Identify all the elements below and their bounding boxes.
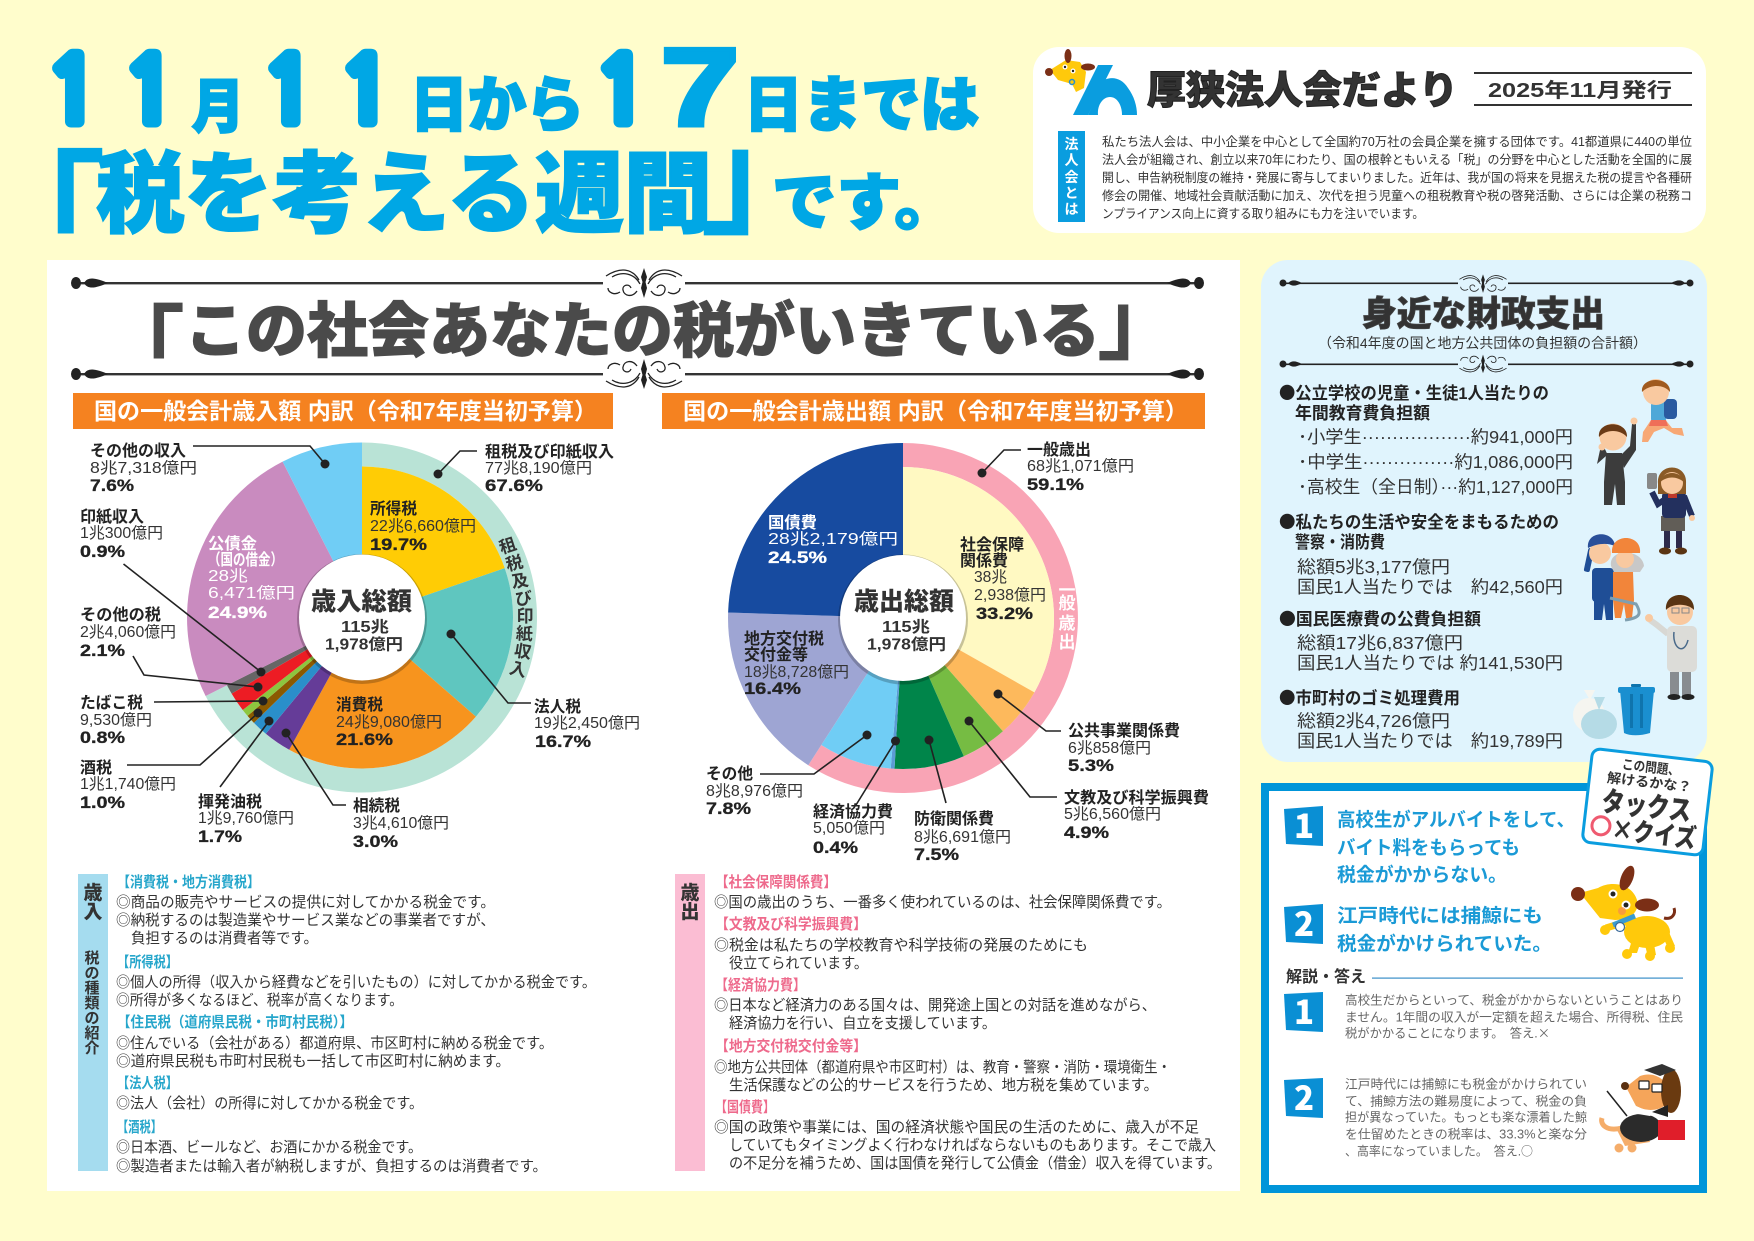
text: 消費税: ◎納税するのは製造業やサービス業などの事業者ですが、 bbox=[116, 912, 495, 929]
main heading bbox=[98, 274, 1184, 396]
label: 経済協力費: 経済協力費 bbox=[813, 802, 893, 821]
text: 地方交付税交付金等: 生活保護などの公的サービスを行うため、地方税を集めています。 bbox=[729, 1077, 1158, 1094]
center circle: 歳出総額 bbox=[854, 588, 954, 616]
label: たばこ税: たばこ税 bbox=[80, 694, 143, 712]
label: 社会保障関係費: 2,938億円 bbox=[974, 586, 1046, 604]
label: 相続税 bbox=[353, 797, 449, 851]
label: 租税及び印紙収入: 67.6% bbox=[485, 476, 543, 495]
label: 公債金: 24.9% bbox=[208, 603, 267, 622]
title: 7 bbox=[661, 26, 739, 149]
ring: 一般歳出 bbox=[808, 443, 1078, 793]
item: education: ･中学生···············約1,086,000円 bbox=[1298, 452, 1573, 472]
label: 地方交付税交付金等: 交付金等 bbox=[744, 645, 808, 664]
panel: tax quiz bbox=[1265, 748, 1713, 1189]
segment: その他の税 bbox=[232, 618, 362, 710]
main heading: 「 bbox=[98, 299, 185, 396]
item: police and fire: ●私たちの生活や安全をまもるための bbox=[1279, 508, 1559, 533]
text: 法人税: 【法人税】 bbox=[117, 1075, 178, 1092]
label: 所得税: 所得税 bbox=[370, 500, 417, 518]
label: 一般歳出 bbox=[1027, 441, 1134, 494]
label: 酒税: 酒税 bbox=[80, 759, 112, 777]
label: 酒税: 1兆1,740億円 bbox=[80, 775, 176, 793]
center circle bbox=[297, 554, 427, 684]
answer 1: 1 bbox=[1294, 986, 1314, 1034]
item: education: ･高校生（全日制）···約1,127,000円 bbox=[1298, 477, 1573, 497]
text: 所得税: ◎個人の所得（収入から経費などを引いたもの）に対してかかる税金です。 bbox=[116, 974, 596, 991]
label: その他: 8兆8,976億円 bbox=[706, 782, 803, 800]
text: 消費税 bbox=[116, 873, 495, 947]
segment: 揮発油税 bbox=[254, 618, 362, 734]
item: garbage: ●市町村のゴミ処理費用 bbox=[1279, 684, 1460, 709]
expenditure bar heading: 国の一般会計歳出額 内訳（令和7年度当初予算） bbox=[683, 398, 1188, 424]
label: その他の税: 2.1% bbox=[80, 641, 125, 660]
ornament bottom bbox=[1280, 355, 1694, 373]
label: 社会保障関係費: 関係費 bbox=[960, 552, 1008, 570]
label: 文教及び科学振興費: 文教及び科学振興費 bbox=[1064, 788, 1209, 807]
panel: tax main bbox=[47, 260, 1240, 1191]
label: その他 bbox=[706, 765, 803, 818]
label: その他: 7.8% bbox=[706, 799, 751, 818]
label: 社会保障関係費: 38兆 bbox=[974, 568, 1007, 586]
panel: newsletter card bbox=[1033, 47, 1706, 233]
text: 所得税 bbox=[116, 954, 596, 1009]
ring label: 租税及び印紙収入 bbox=[497, 534, 534, 681]
ring: 租税及び印紙収入 bbox=[206, 442, 537, 792]
label: 社会保障関係費: 社会保障 bbox=[960, 536, 1024, 554]
segment: 公債金 bbox=[187, 462, 362, 696]
segment: 酒税 bbox=[248, 618, 362, 723]
icon: schoolboy bbox=[1597, 418, 1638, 505]
ornament top bbox=[1280, 274, 1694, 293]
chart: expenditure pie bbox=[706, 441, 1209, 864]
title: 1 bbox=[594, 47, 649, 136]
question 1: 高校生がアルバイトをして、 bbox=[1337, 808, 1575, 831]
expenditure bar heading bbox=[662, 393, 1205, 429]
item: medical: ●国民医療費の公費負担額 bbox=[1279, 605, 1481, 630]
title: 日までは bbox=[744, 72, 979, 139]
question 2: 江戸時代には捕鯨にも bbox=[1337, 904, 1543, 927]
answer 2 bbox=[1284, 1072, 1588, 1160]
panel: familiar spending bbox=[1261, 260, 1707, 762]
text: 文教及び科学振興費: ◎税金は私たちの学校教育や科学技術の発展のためにも bbox=[714, 937, 1088, 954]
revenue bar heading: 国の一般会計歳入額 内訳（令和7年度当初予算） bbox=[94, 398, 597, 424]
answer 2: 江戸時代には捕鯨にも税金がかけられてい bbox=[1345, 1076, 1587, 1092]
item: medical bbox=[1279, 605, 1563, 673]
text: 国債費 bbox=[714, 1099, 1221, 1172]
text: 住民税 bbox=[116, 1013, 553, 1070]
icon: police and firefighter bbox=[1584, 534, 1644, 620]
text: 消費税: 【消費税・地方消費税】 bbox=[117, 873, 260, 891]
label: 相続税: 3兆4,610億円 bbox=[353, 814, 449, 832]
label: 消費税 bbox=[336, 696, 442, 749]
label: 印紙収入: 1兆300億円 bbox=[80, 524, 163, 542]
label: 印紙収入 bbox=[80, 507, 163, 561]
text: 地方交付税交付金等: ◎地方公共団体（都道府県や市区町村）は、教育・警察・消防・環境衛生・ bbox=[714, 1059, 1171, 1076]
segment: 法人税 bbox=[362, 568, 513, 717]
label: 消費税: 消費税 bbox=[336, 696, 383, 714]
label: 公共事業関係費 bbox=[1068, 721, 1180, 775]
label: 揮発油税 bbox=[198, 793, 294, 846]
text: 社会保障関係費: ◎国の歳出のうち、一番多く使われているのは、社会保障関係費です。 bbox=[714, 893, 1171, 911]
label: 酒税: 1.0% bbox=[80, 793, 125, 812]
text: 経済協力費: 【経済協力費】 bbox=[715, 977, 806, 994]
side tab: 歳入: 歳入 bbox=[83, 881, 103, 923]
label: 所得税: 22兆6,660億円 bbox=[370, 517, 476, 535]
label: 一般歳出: 68兆1,071億円 bbox=[1027, 457, 1134, 475]
label: 相続税: 3.0% bbox=[353, 832, 398, 851]
title: 月 bbox=[192, 75, 244, 140]
item: education: 年間教育費負担額 bbox=[1295, 403, 1430, 423]
label: 所得税: 19.7% bbox=[370, 535, 427, 554]
label: その他の収入: その他の収入 bbox=[90, 442, 186, 460]
item: medical: 総額17兆6,837億円 bbox=[1297, 633, 1463, 653]
answer 2: 2 bbox=[1294, 1072, 1314, 1120]
label: 国債費: 24.5% bbox=[768, 548, 827, 567]
label: その他: その他 bbox=[706, 765, 753, 783]
text: 所得税: 【所得税】 bbox=[117, 954, 178, 971]
text: 文教及び科学振興費 bbox=[714, 915, 1088, 972]
heading ornament bottom bbox=[71, 359, 1204, 389]
label: その他の税: その他の税 bbox=[80, 606, 161, 624]
title: 日から bbox=[410, 72, 584, 139]
leaders: expenditure bbox=[760, 450, 1061, 805]
description: 修会の開催、地域社会貢献活動に加え、次代を担う児童への租税教育や税の啓発活動、さらには企業の税務コ bbox=[1102, 188, 1692, 203]
center circle bbox=[838, 554, 968, 684]
badge: quiz title: タックス bbox=[1600, 786, 1693, 827]
leaders: revenue bbox=[124, 446, 531, 805]
label: 文教及び科学振興費: 5兆6,560億円 bbox=[1064, 805, 1161, 823]
label: その他の収入 bbox=[90, 442, 197, 495]
item: education: ･小学生··················約941,000円 bbox=[1298, 427, 1573, 447]
newsletter name: 厚狭法人会だより bbox=[1147, 70, 1458, 113]
segment: 公共事業関係費 bbox=[903, 618, 1034, 731]
text: 国債費: の不足分を補うため、国は国債を発行して公債金（借金）収入を得ています。 bbox=[729, 1155, 1221, 1172]
segment: 所得税 bbox=[362, 466, 505, 618]
chart: revenue pie bbox=[80, 442, 640, 851]
label: 地方交付税交付金等: 地方交付税 bbox=[744, 629, 824, 648]
label: その他の税 bbox=[80, 606, 176, 660]
text: 経済協力費: ◎日本など経済力のある国々は、開発途上国との対話を進めながら、 bbox=[714, 997, 1156, 1014]
description: 開し、申告納税制度の維持・発展に寄与してまいりました。近年は、我が国の将来を見据えた税の提言や各種研 bbox=[1102, 170, 1692, 185]
label: 防衛関係費: 防衛関係費 bbox=[914, 809, 994, 828]
segment: 消費税 bbox=[289, 618, 476, 768]
label: 一般歳出: 59.1% bbox=[1027, 475, 1084, 494]
label: 文教及び科学振興費: 4.9% bbox=[1064, 823, 1109, 842]
tab: 法人会とは: 法人会とは bbox=[1064, 136, 1078, 217]
item: medical: 国民1人当たりでは 約141,530円 bbox=[1297, 653, 1563, 673]
icon: doctor bbox=[1645, 595, 1697, 700]
ring label: 一般歳出 bbox=[1058, 581, 1076, 652]
segment: 国債費 bbox=[728, 443, 903, 618]
label: 防衛関係費: 7.5% bbox=[914, 845, 959, 864]
label: 揮発油税: 揮発油税 bbox=[198, 793, 262, 811]
description bbox=[1102, 134, 1692, 221]
side tab: 歳出: 歳出 bbox=[680, 881, 700, 923]
label: 国債費: 28兆2,179億円 bbox=[768, 530, 898, 548]
main heading: この社会あなたの税がいきている bbox=[185, 298, 1100, 365]
label: 公債金: 28兆 bbox=[208, 567, 248, 585]
label: 酒税 bbox=[80, 759, 176, 812]
label: 消費税: 24兆9,080億円 bbox=[336, 713, 442, 731]
panel heading: 身近な財政支出 bbox=[1362, 295, 1605, 334]
item: police and fire: 総額5兆3,177億円 bbox=[1297, 557, 1450, 577]
text: 所得税: ◎所得が多くなるほど、税率が高くなります。 bbox=[116, 991, 403, 1009]
item: police and fire: 国民1人当たりでは 約42,560円 bbox=[1297, 577, 1563, 597]
tab: 法人会とは bbox=[1058, 131, 1085, 222]
icon: schoolgirl bbox=[1647, 468, 1695, 554]
title: 11 bbox=[46, 47, 177, 136]
item: police and fire: 警察・消防費 bbox=[1295, 533, 1385, 552]
text: 消費税: ◎商品の販売やサービスの提供に対してかかる税金です。 bbox=[116, 894, 495, 911]
item: police and fire bbox=[1279, 508, 1563, 597]
question 1: 税金がかからない。 bbox=[1337, 863, 1507, 886]
label: 法人税: 法人税 bbox=[534, 697, 581, 716]
answer 2: を仕留めたときの税率は、33.3%と楽な分 bbox=[1345, 1126, 1588, 1142]
icon: logo with dog bbox=[1045, 49, 1137, 115]
label: 法人税: 16.7% bbox=[535, 732, 591, 751]
label: 公債金: 公債金 bbox=[208, 534, 257, 553]
question 1 bbox=[1284, 800, 1575, 886]
label: 租税及び印紙収入: 租税及び印紙収入 bbox=[485, 442, 614, 461]
label: たばこ税 bbox=[80, 694, 152, 747]
text: 住民税: 【住民税（道府県民税・市町村民税）】 bbox=[117, 1013, 353, 1031]
answer 2: 、高率になっていました。 答え.○ bbox=[1345, 1140, 1533, 1160]
label: 租税及び印紙収入: 77兆8,190億円 bbox=[485, 459, 592, 477]
label: 公債金: （国の借金） bbox=[208, 550, 283, 569]
text: 経済協力費 bbox=[714, 977, 1156, 1032]
question 2 bbox=[1284, 898, 1552, 955]
item: education: ●公立学校の児童・生徒1人当たりの bbox=[1279, 379, 1549, 404]
title: 」 bbox=[700, 103, 834, 252]
label: 租税及び印紙収入 bbox=[485, 442, 614, 495]
item: garbage bbox=[1279, 684, 1563, 751]
text: 文教及び科学振興費: 【文教及び科学振興費】 bbox=[715, 915, 867, 933]
label: 法人税: 19兆2,450億円 bbox=[534, 714, 640, 732]
label: 防衛関係費 bbox=[914, 809, 1011, 864]
description: 法人会が組織され、創立以来70年にわたり、国の根幹ともいえる「税」の分野を中心とした活動を全国的に展 bbox=[1102, 152, 1692, 167]
text: 地方交付税交付金等 bbox=[714, 1037, 1171, 1094]
text: 国債費: ◎国の政策や事業には、国の経済状態や国民の生活のために、歳入が不足 bbox=[714, 1119, 1199, 1136]
text: 地方交付税交付金等: 【地方交付税交付金等】 bbox=[715, 1037, 867, 1055]
text: 酒税: ◎日本酒、ビールなど、お酒にかかる税金です。 bbox=[116, 1139, 422, 1156]
text: 酒税: ◎製造者または輸入者が納税しますが、負担するのは消費者です。 bbox=[116, 1158, 547, 1175]
heading ornament top bbox=[71, 268, 1204, 298]
side tab: 歳入 bbox=[78, 874, 108, 1171]
panel: revenue tax types bbox=[78, 873, 596, 1175]
text: 社会保障関係費 bbox=[714, 874, 1171, 911]
label: 国債費: 国債費 bbox=[768, 513, 817, 532]
label: 揮発油税: 1兆9,760億円 bbox=[198, 809, 294, 827]
label: 経済協力費 bbox=[813, 802, 893, 857]
text: 文教及び科学振興費: 役立てられています。 bbox=[729, 955, 868, 972]
center circle: 1,978億円 bbox=[325, 636, 403, 654]
main heading: 」 bbox=[1097, 274, 1184, 371]
icon: running boy bbox=[1642, 379, 1684, 442]
center circle: 1,978億円 bbox=[867, 636, 946, 654]
label: 印紙収入: 印紙収入 bbox=[80, 507, 144, 526]
segment: 相続税 bbox=[266, 618, 362, 750]
icon: garbage bags and bin bbox=[1573, 684, 1655, 739]
answer 1: ません。1年間の収入が一定額を超えた場合、所得税、住民 bbox=[1345, 1010, 1684, 1024]
answers heading: 解説・答え bbox=[1286, 967, 1366, 986]
label: 相続税: 相続税 bbox=[353, 797, 400, 815]
text: 酒税: 【酒税】 bbox=[117, 1119, 162, 1136]
label: 所得税 bbox=[370, 500, 476, 554]
title: 11 bbox=[262, 47, 393, 136]
segment: 文教及び科学振興費 bbox=[903, 618, 1003, 756]
item: garbage: 総額2兆4,726億円 bbox=[1297, 711, 1450, 731]
label: 公債金 bbox=[208, 534, 295, 622]
center circle: 歳入総額 bbox=[311, 588, 412, 616]
side tab: 歳入: 税の種類の紹介 bbox=[84, 950, 100, 1057]
item: education bbox=[1279, 379, 1573, 497]
label: 地方交付税交付金等: 16.4% bbox=[744, 679, 801, 698]
label: 印紙収入: 0.9% bbox=[80, 542, 125, 561]
badge: quiz title: 解けるかな？ bbox=[1606, 770, 1692, 795]
panel: expenditure items bbox=[675, 874, 1221, 1172]
label: 公共事業関係費: 5.3% bbox=[1068, 756, 1114, 775]
subheading: （令和4年度の国と地方公共団体の負担額の合計額） bbox=[1318, 335, 1647, 351]
label: その他の収入: 7.6% bbox=[90, 476, 134, 495]
description: ンプライアンス向上に資する取り組みにも力を注いでいます。 bbox=[1102, 206, 1424, 221]
revenue bar heading bbox=[73, 393, 613, 429]
label: たばこ税: 9,530億円 bbox=[80, 711, 152, 729]
segment: 経済協力費 bbox=[891, 618, 903, 769]
label: 公共事業関係費: 公共事業関係費 bbox=[1068, 721, 1180, 740]
label: 揮発油税: 1.7% bbox=[198, 827, 242, 846]
issue date: 2025年11月発行 bbox=[1488, 79, 1672, 102]
label: その他の税: 2兆4,060億円 bbox=[80, 623, 176, 641]
text: 住民税: ◎道府県民税も市町村民税も一括して市区町村に納めます。 bbox=[116, 1053, 510, 1070]
answer 1: 税がかかることになります。 答え.× bbox=[1345, 1022, 1550, 1042]
center circle: 115兆 bbox=[341, 618, 390, 636]
text: 法人税: ◎法人（会社）の所得に対してかかる税金です。 bbox=[116, 1095, 423, 1112]
answer 1 bbox=[1284, 986, 1684, 1042]
label: 社会保障関係費 bbox=[960, 536, 1046, 623]
item: garbage: 国民1人当たりでは 約19,789円 bbox=[1297, 731, 1563, 751]
badge: quiz title bbox=[1582, 748, 1713, 857]
text: 消費税: 負担するのは消費者等です。 bbox=[131, 929, 318, 947]
question 1: 1 bbox=[1294, 800, 1314, 848]
title: です。 bbox=[772, 169, 959, 238]
label: その他の収入: 8兆7,318億円 bbox=[90, 459, 197, 477]
segment: 地方交付税交付金等 bbox=[728, 612, 903, 765]
label: 法人税 bbox=[534, 697, 640, 751]
text: 国債費: 【国債費】 bbox=[715, 1099, 775, 1116]
label: 文教及び科学振興費 bbox=[1064, 788, 1209, 842]
icon: professor dog bbox=[1602, 1064, 1685, 1152]
text: 経済協力費: 経済協力を行い、自立を支援しています。 bbox=[729, 1015, 996, 1032]
segment: その他の収入 bbox=[283, 442, 362, 618]
label: 経済協力費: 0.4% bbox=[813, 838, 858, 857]
label: 一般歳出: 一般歳出 bbox=[1027, 441, 1091, 459]
label: 消費税: 21.6% bbox=[336, 730, 393, 749]
icon: yellow dog bbox=[1571, 864, 1675, 961]
answer 2: て、捕鯨方法の難易度によって、税金の負 bbox=[1345, 1094, 1587, 1108]
text: 社会保障関係費: 【社会保障関係費】 bbox=[715, 874, 837, 891]
segment: 社会保障関係費 bbox=[903, 467, 1054, 692]
label: 地方交付税交付金等: 18兆8,728億円 bbox=[744, 663, 849, 681]
segment: たばこ税 bbox=[243, 618, 362, 716]
text: 住民税: ◎住んでいる（会社がある）都道府県、市区町村に納める税金です。 bbox=[116, 1035, 553, 1052]
text: 国債費: していてもタイミングよく行わなければならないものもあります。そこで歳入 bbox=[729, 1137, 1216, 1154]
label: 社会保障関係費: 33.2% bbox=[976, 604, 1033, 623]
text: 酒税 bbox=[116, 1119, 547, 1175]
segment: その他 bbox=[821, 618, 903, 768]
title bbox=[0, 26, 979, 291]
side tab: 歳出 bbox=[675, 874, 705, 1171]
title: 税を考える週間 bbox=[96, 145, 712, 244]
badge: quiz title: ×クイズ bbox=[1610, 809, 1698, 856]
label: たばこ税: 0.8% bbox=[80, 728, 125, 747]
label: 地方交付税交付金等 bbox=[744, 629, 849, 698]
segment: 防衛関係費 bbox=[894, 618, 964, 769]
question 2: 税金がかけられていた。 bbox=[1337, 932, 1552, 955]
text: 法人税 bbox=[116, 1075, 423, 1112]
segment: 印紙収入 bbox=[227, 618, 362, 694]
label: 公共事業関係費: 6兆858億円 bbox=[1068, 739, 1151, 757]
label: 防衛関係費: 8兆6,691億円 bbox=[914, 828, 1011, 846]
question 2: 2 bbox=[1294, 898, 1314, 946]
question 1: バイト料をもらっても bbox=[1337, 837, 1520, 859]
label: 公債金: 6,471億円 bbox=[208, 584, 295, 602]
description: 私たち法人会は、中小企業を中心として全国約70万社の会員企業を擁する団体です。41都道県に440の単位 bbox=[1102, 134, 1692, 149]
center circle: 115兆 bbox=[882, 618, 931, 636]
answer 1: 高校生だからといって、税金がかからないということはあり bbox=[1345, 992, 1683, 1008]
badge: quiz title: この問題、 bbox=[1621, 757, 1681, 778]
label: 国債費 bbox=[768, 513, 898, 567]
label: 経済協力費: 5,050億円 bbox=[813, 819, 885, 837]
answer 2: 担が異なっていた。もっとも楽な漂着した鯨 bbox=[1345, 1110, 1587, 1124]
